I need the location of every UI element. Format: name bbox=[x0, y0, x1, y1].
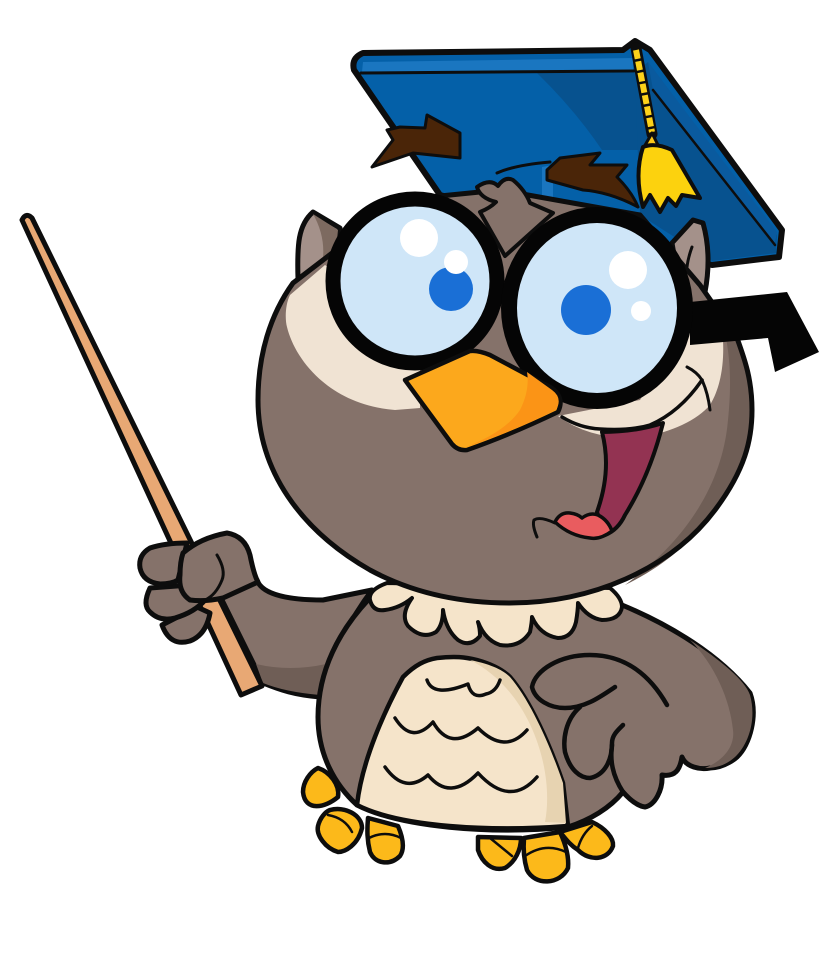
graduation cap bbox=[353, 41, 782, 265]
glasses temple arm bbox=[690, 292, 819, 372]
mouth bbox=[533, 367, 710, 538]
body and right wing bbox=[318, 600, 753, 830]
head tuft bbox=[477, 162, 553, 256]
owl feet bbox=[303, 768, 613, 881]
left arm bbox=[220, 567, 372, 697]
face cream patches bbox=[286, 265, 723, 438]
tassel bbox=[636, 48, 700, 212]
left hand gripping pointer bbox=[140, 533, 258, 642]
beak bbox=[405, 351, 560, 450]
belly bbox=[357, 657, 568, 828]
eyebrow left bbox=[372, 115, 460, 167]
eyebrow right bbox=[547, 153, 638, 207]
right lens bbox=[509, 215, 685, 401]
toe creases bbox=[328, 815, 592, 856]
left ear bbox=[298, 212, 340, 279]
pointer stick bbox=[22, 215, 262, 695]
wing feather lines bbox=[532, 655, 667, 792]
collar bbox=[370, 583, 622, 645]
wing shading bbox=[690, 640, 752, 768]
right ear bbox=[672, 220, 708, 292]
head bbox=[258, 190, 752, 603]
left lens bbox=[333, 199, 497, 363]
